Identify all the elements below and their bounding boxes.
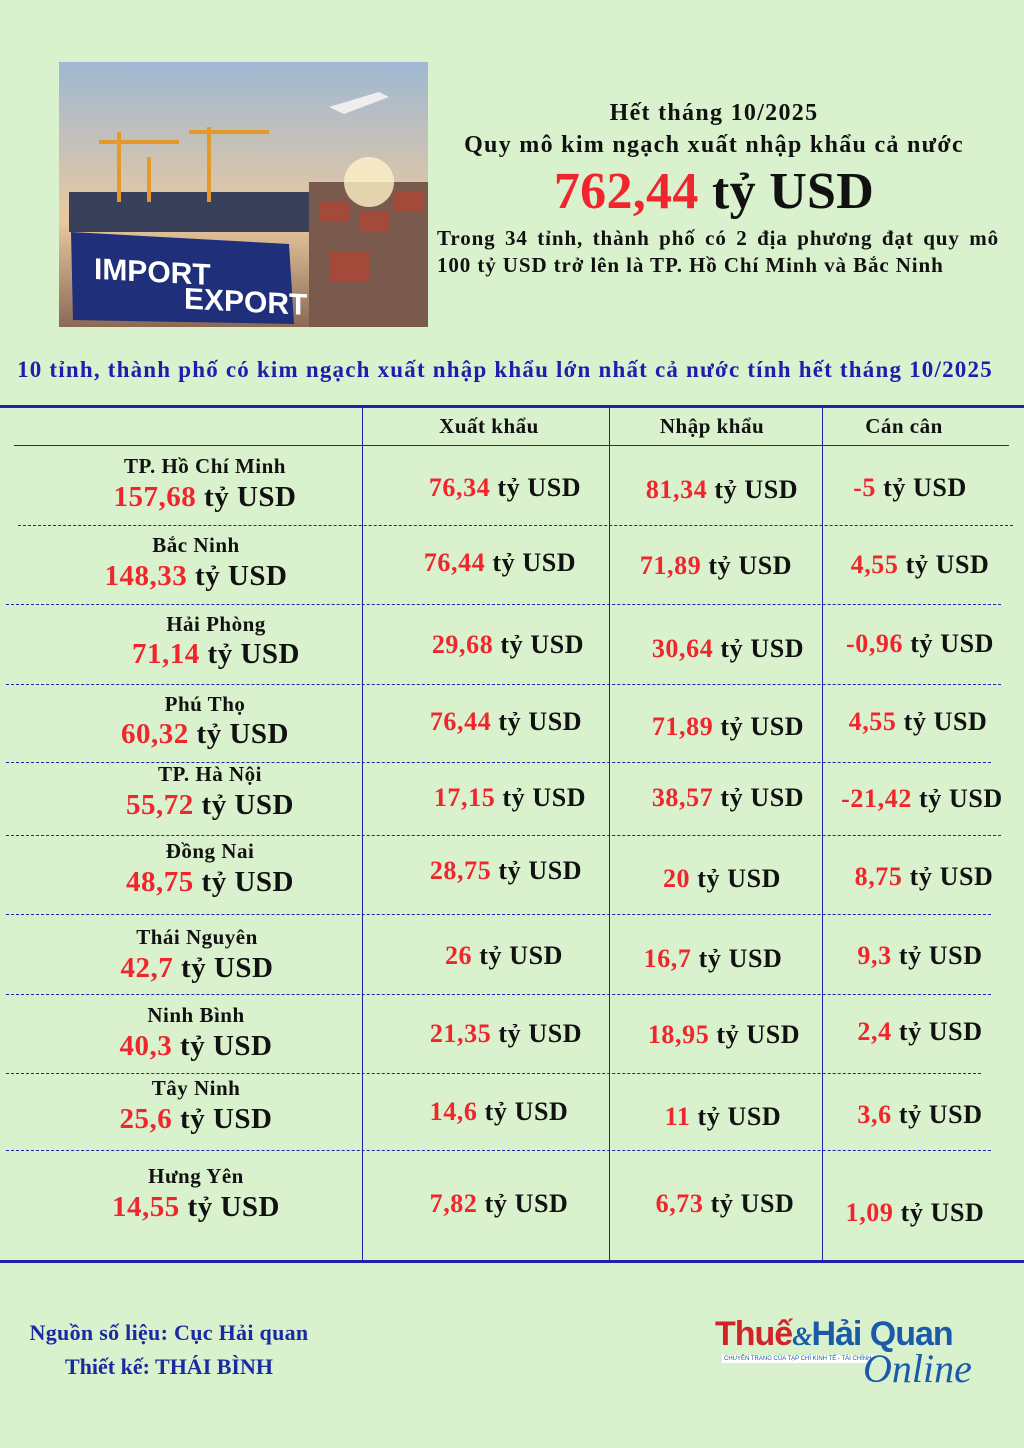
text: Xuất khẩu — [439, 414, 539, 438]
text: 76,44 tỷ USD — [424, 548, 576, 577]
text: Đồng Nai — [166, 839, 254, 863]
text: 40,3 tỷ USD — [120, 1030, 272, 1062]
text: 148,33 tỷ USD — [105, 560, 287, 592]
text: 7,82 tỷ USD — [430, 1189, 568, 1218]
text: Cán cân — [865, 414, 943, 438]
text: -0,96 tỷ USD — [846, 629, 994, 658]
table header — [439, 414, 943, 438]
text: -21,42 tỷ USD — [841, 784, 1003, 813]
container with IMPORT EXPORT: IMPORT — [94, 253, 211, 292]
text: Thái Nguyên — [136, 925, 258, 949]
table — [0, 405, 1024, 1263]
text: Tây Ninh — [152, 1076, 240, 1100]
row: Dong Nai — [126, 839, 993, 898]
text: 81,34 tỷ USD — [646, 475, 798, 504]
header text: Hết tháng 10/2025 — [610, 100, 818, 126]
text: 1,09 tỷ USD — [846, 1198, 984, 1227]
text: Ninh Bình — [147, 1003, 245, 1027]
text: 18,95 tỷ USD — [648, 1020, 800, 1049]
text: 4,55 tỷ USD — [849, 707, 987, 736]
text: TP. Hà Nội — [158, 762, 262, 786]
row: Tay Ninh — [120, 1076, 983, 1135]
text: 9,3 tỷ USD — [857, 941, 983, 970]
text: 25,6 tỷ USD — [120, 1103, 272, 1135]
text: 60,32 tỷ USD — [121, 718, 289, 750]
text: 71,89 tỷ USD — [652, 712, 804, 741]
text: 16,7 tỷ USD — [644, 944, 782, 973]
photo: import export port — [59, 62, 428, 327]
text: Bắc Ninh — [152, 533, 240, 557]
text: 38,57 tỷ USD — [652, 783, 804, 812]
text: 71,89 tỷ USD — [640, 551, 792, 580]
summary paragraph: Trong 34 tỉnh, thành phố có 2 địa phương đạt quy mô 100 tỷ USD trở lên là TP. Hồ Chí Minh và Bắc Ninh — [437, 226, 999, 277]
text: 42,7 tỷ USD — [121, 952, 273, 984]
text: 3,6 tỷ USD — [857, 1100, 983, 1129]
text: 14,6 tỷ USD — [430, 1097, 568, 1126]
subtitle: 10 tỉnh, thành phố có kim ngạch xuất nhập khẩu lớn nhất cả nước tính hết tháng 10/2025 — [17, 357, 993, 382]
text: 20 tỷ USD — [663, 864, 781, 893]
logo — [715, 1315, 972, 1391]
row: Ninh Binh — [120, 1003, 983, 1062]
source credit: Nguồn số liệu: Cục Hải quan — [30, 1320, 308, 1345]
text: 2,4 tỷ USD — [857, 1017, 983, 1046]
text: Hưng Yên — [148, 1164, 244, 1188]
logo: Online — [863, 1346, 972, 1391]
row: Hai Phong — [132, 612, 994, 670]
row: TP. Ho Chi Minh — [114, 454, 967, 513]
text: 11 tỷ USD — [665, 1102, 781, 1131]
big number: 762,44 tỷ USD — [554, 163, 874, 220]
text: 71,14 tỷ USD — [132, 638, 300, 670]
row: Phu Tho — [121, 692, 987, 750]
text: 76,44 tỷ USD — [430, 707, 582, 736]
text: 4,55 tỷ USD — [851, 550, 989, 579]
text: 48,75 tỷ USD — [126, 866, 294, 898]
container with IMPORT EXPORT: EXPORT — [184, 283, 308, 322]
text: 8,75 tỷ USD — [855, 862, 993, 891]
text: 14,55 tỷ USD — [112, 1191, 280, 1223]
text: 26 tỷ USD — [445, 941, 563, 970]
text: Hải Phòng — [166, 612, 266, 636]
text: Nhập khẩu — [660, 414, 764, 438]
text: TP. Hồ Chí Minh — [124, 454, 286, 478]
row: Hung Yen — [112, 1164, 984, 1227]
logo: CHUYÊN TRANG CỦA TẠP CHÍ KINH TẾ - TÀI CHÍNH — [724, 1356, 871, 1362]
text: 76,34 tỷ USD — [429, 473, 581, 502]
text: Phú Thọ — [165, 692, 245, 716]
container with IMPORT EXPORT — [71, 232, 308, 324]
logo: Thuế&Hải Quan — [715, 1315, 953, 1353]
text: 30,64 tỷ USD — [652, 634, 804, 663]
text: 6,73 tỷ USD — [656, 1189, 794, 1218]
text: 29,68 tỷ USD — [432, 630, 584, 659]
text: Quy mô kim ngạch xuất nhập khẩu cả nước — [464, 132, 964, 158]
row: Thai Nguyen — [120, 925, 983, 984]
row: Bac Ninh — [105, 533, 989, 592]
row: Ha Noi — [126, 762, 1003, 821]
text: -5 tỷ USD — [853, 473, 967, 502]
text: 28,75 tỷ USD — [430, 856, 582, 885]
text: 17,15 tỷ USD — [434, 783, 586, 812]
text: 157,68 tỷ USD — [114, 481, 296, 513]
text: 21,35 tỷ USD — [430, 1019, 582, 1048]
designer credit: Thiết kế: THÁI BÌNH — [65, 1354, 273, 1379]
text: 55,72 tỷ USD — [126, 789, 294, 821]
